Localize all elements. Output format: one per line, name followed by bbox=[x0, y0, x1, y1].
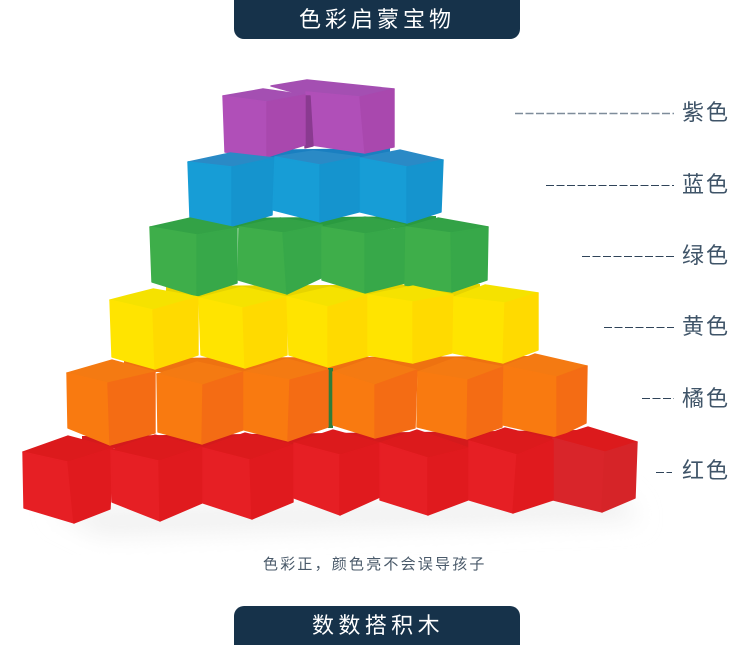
row: blue blocks bbox=[188, 150, 443, 226]
cube: green 1 bbox=[150, 218, 237, 296]
label: red: 红色 bbox=[682, 458, 730, 483]
cube: orange 6 bbox=[503, 354, 587, 437]
cube: blue 1 bbox=[188, 153, 274, 226]
cube: green 4 bbox=[405, 218, 488, 292]
cube: green 2 bbox=[238, 218, 322, 294]
label: purple: 紫色 bbox=[682, 100, 730, 125]
row: green blocks bbox=[150, 217, 488, 296]
cube: orange 4 bbox=[333, 358, 417, 438]
caption: 色彩正，颜色亮不会误导孩子 bbox=[263, 556, 487, 573]
cube: yellow 4 bbox=[368, 286, 453, 363]
cube: orange 1 bbox=[67, 360, 155, 445]
row: orange blocks bbox=[67, 354, 587, 445]
gap fill between rows bbox=[82, 148, 578, 448]
cube: orange 5 bbox=[417, 358, 503, 439]
cube: red 3 bbox=[203, 433, 293, 519]
cube: green 3 bbox=[322, 217, 405, 293]
section heading bbox=[234, 606, 520, 645]
row: red blocks bbox=[23, 427, 637, 523]
cube: red 7 bbox=[553, 427, 637, 512]
floor shadow bbox=[50, 495, 640, 535]
row: purple blocks bbox=[223, 80, 394, 157]
label: orange: 橘色 bbox=[682, 386, 730, 411]
label: blue: 蓝色 bbox=[682, 172, 730, 197]
cube: yellow 5 bbox=[453, 285, 538, 363]
cube: red 6 bbox=[469, 428, 553, 513]
cube: blue 3 bbox=[360, 150, 443, 223]
cube: yellow 3 bbox=[287, 287, 368, 367]
title bbox=[234, 0, 520, 39]
cube: yellow 1 bbox=[110, 289, 198, 369]
cube: purple front bbox=[223, 89, 305, 157]
cube: blue 2 bbox=[273, 151, 359, 222]
row: yellow blocks bbox=[110, 285, 538, 369]
cube: red 1 bbox=[23, 436, 113, 523]
cube: purple back bbox=[271, 80, 394, 153]
cube: orange 2 bbox=[157, 362, 243, 444]
cube: red 2 bbox=[111, 435, 202, 521]
section heading: 数数搭积木 bbox=[312, 613, 444, 638]
cube: yellow 2 bbox=[199, 287, 287, 368]
cube: orange 3 bbox=[244, 359, 328, 441]
label: green: 绿色 bbox=[682, 243, 730, 268]
leader lines bbox=[515, 114, 674, 472]
cube: red 4 bbox=[294, 430, 380, 515]
title: 色彩启蒙宝物 bbox=[299, 7, 455, 32]
label: yellow: 黄色 bbox=[682, 314, 730, 339]
cube: red 5 bbox=[380, 430, 469, 515]
